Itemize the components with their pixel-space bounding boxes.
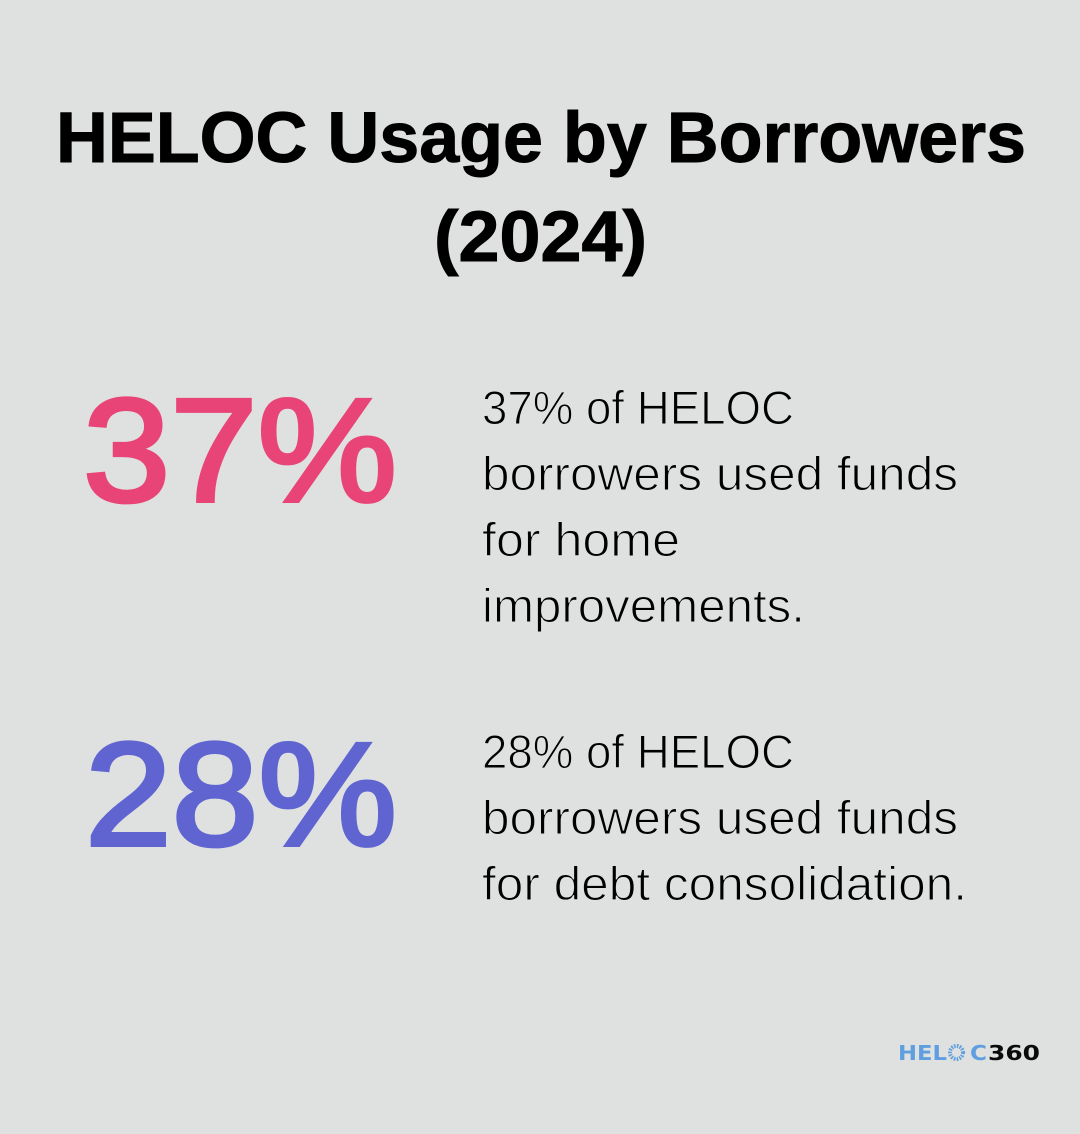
- logo: HELOC360: C: [970, 1041, 987, 1065]
- description: debt consolidation: borrowers used funds: [482, 791, 958, 844]
- title: (2024): [434, 198, 647, 277]
- logo: HELOC360: 360: [988, 1041, 1040, 1065]
- description: debt consolidation: [482, 725, 967, 910]
- stat: 37%: 37%: [83, 369, 397, 533]
- title: HELOC Usage by Borrowers: [56, 99, 1026, 178]
- stat: 28%: 28%: [85, 713, 397, 877]
- description: debt consolidation: 28% of HELOC: [482, 725, 794, 778]
- description: debt consolidation: for debt consolidation.: [482, 857, 967, 910]
- description: home improvements: for home: [482, 513, 680, 566]
- title: [56, 99, 1026, 277]
- logo: HELOC360: HEL: [898, 1041, 947, 1065]
- description: home improvements: improvements.: [482, 579, 805, 632]
- description: home improvements: 37% of HELOC: [482, 381, 794, 434]
- description: home improvements: [482, 381, 958, 632]
- description: home improvements: borrowers used funds: [482, 447, 958, 500]
- logo: HELOC360: [898, 1041, 1040, 1065]
